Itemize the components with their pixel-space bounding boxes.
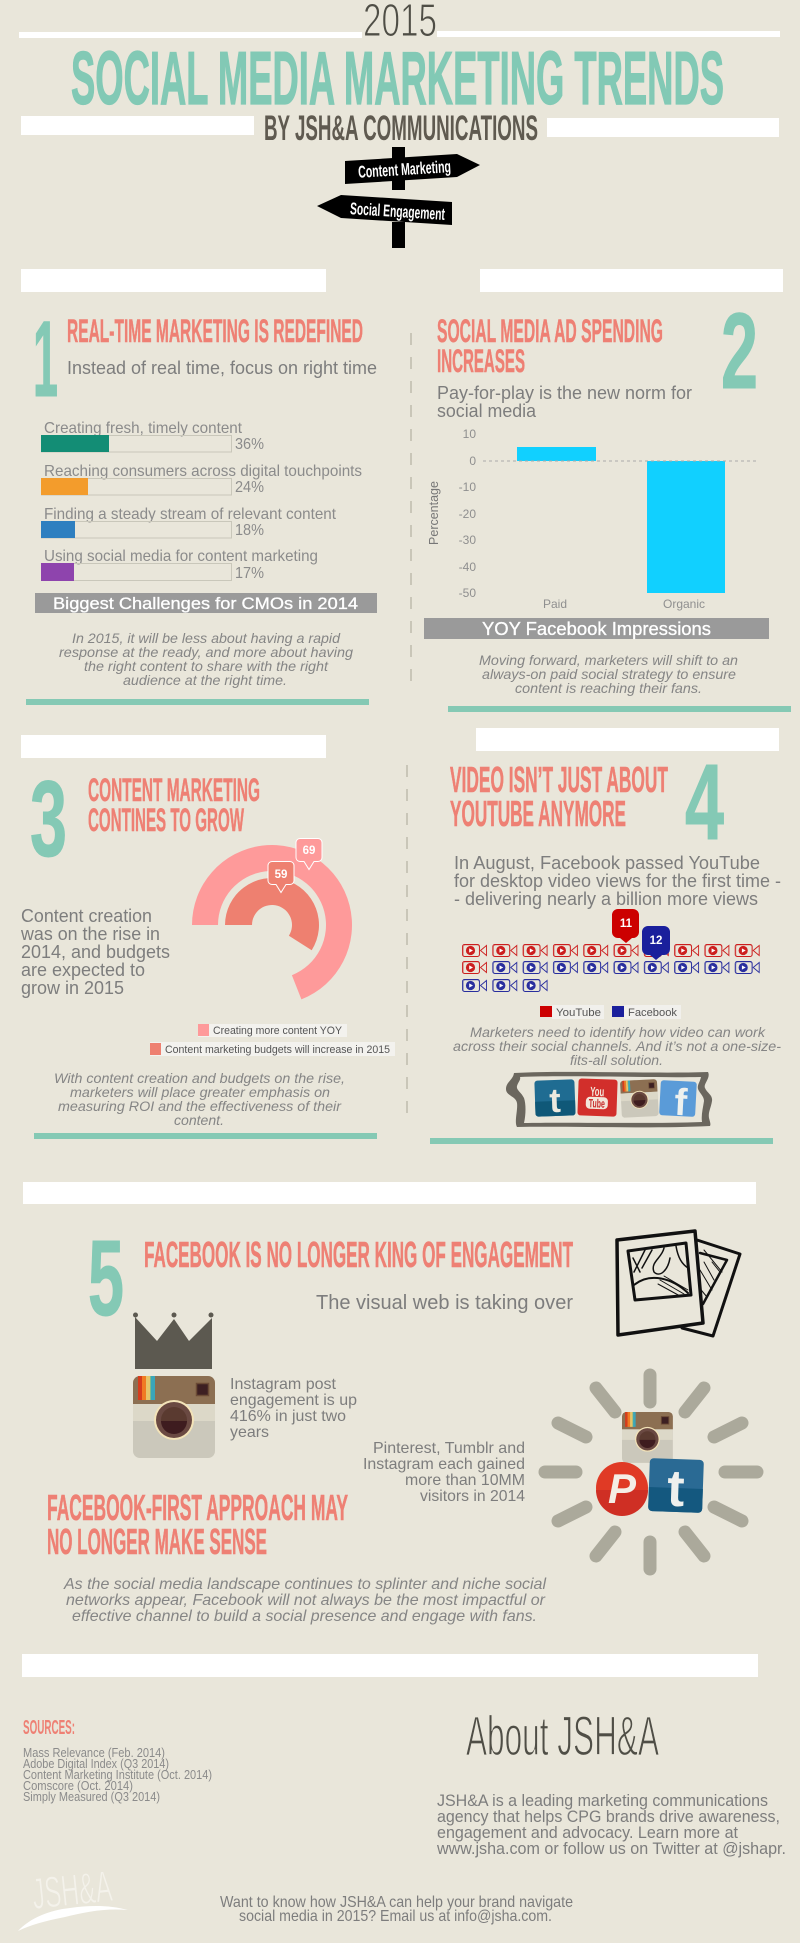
sources list: Comscore (Oct. 2014) [23, 1779, 133, 1793]
legend 3: Content marketing budgets will increase in 2015 [165, 1044, 390, 1056]
bar chart: YOY impressions: -40 [459, 560, 476, 574]
heading 3: CONTINES TO GROW [88, 802, 244, 838]
takeaway 1 [59, 630, 353, 688]
call to action: Want to know how JSH&A can help your brand navigate [220, 1894, 573, 1911]
panel: section 3 [20, 735, 395, 1139]
bar chart: YOY impressions: Paid [543, 597, 567, 611]
header rule left [19, 32, 362, 38]
body text 3: 2014, and budgets [21, 942, 170, 962]
body text 3 [20, 906, 170, 998]
heading 4 [450, 759, 668, 834]
takeaway 5 [63, 1576, 546, 1625]
pictogram chart: video icons [462, 909, 759, 992]
panel: section 3: CONTENT MARKETING [88, 772, 260, 808]
panel: section 5 [23, 1182, 757, 1625]
heading 2: INCREASES [437, 343, 525, 379]
call to action [220, 1894, 573, 1925]
footer: SOURCES: [23, 1717, 75, 1739]
crown icon [133, 1312, 214, 1369]
body text 3: are expected to [21, 960, 145, 980]
heading 2 [437, 313, 663, 379]
legend 4 [540, 1005, 681, 1019]
row: reaching consumers: 24% [235, 479, 264, 496]
subtitle rule left [21, 116, 254, 135]
about text: agency that helps CPG brands drive awareness, [437, 1807, 780, 1826]
icon: instagram [620, 1079, 659, 1118]
donut chart [192, 838, 352, 999]
bar chart: YOY impressions [427, 427, 759, 611]
icon: tumblr [648, 1458, 704, 1519]
legend 3 [150, 1024, 395, 1056]
sources list [23, 1746, 212, 1804]
stat: pinterest tumblr instagram: Instagram each gained [363, 1456, 525, 1473]
row: creating content: Creating fresh, timely content [44, 420, 243, 437]
legend 3: Creating more content YOY [213, 1025, 343, 1037]
sources list: Mass Relevance (Feb. 2014) [23, 1746, 165, 1760]
body text 3: grow in 2015 [21, 978, 124, 998]
footer [18, 1654, 786, 1931]
row: creating content: 36% [235, 436, 264, 453]
bar chart: YOY impressions: 10 [463, 427, 476, 441]
heading 5b [47, 1487, 348, 1562]
number 2: 2 [721, 290, 758, 411]
row: finding stream: Finding a steady stream of relevant content [44, 506, 337, 523]
takeaway 2: content is reaching their fans. [515, 680, 702, 696]
social icons in frame [506, 1072, 712, 1127]
body text 3: was on the rise in [20, 924, 160, 944]
subheading 5: The visual web is taking over [316, 1292, 573, 1314]
marker 12 [642, 926, 670, 960]
body text 4: - delivering nearly a billion more views [454, 889, 758, 909]
subheading 2: Pay-for-play is the new norm for [437, 383, 692, 403]
logo: JSH&A [18, 1862, 128, 1931]
bar chart: YOY impressions: -10 [459, 480, 476, 494]
takeaway 5: As the social media landscape continues to splinter and niche social [63, 1576, 546, 1593]
takeaway 4: across their social channels. And it’s not a one-size- [453, 1038, 781, 1054]
marker 12: 12 [650, 935, 662, 947]
takeaway 2: Moving forward, marketers will shift to an [479, 652, 738, 668]
stat: instagram engagement: 416% in just two [230, 1408, 346, 1425]
marker 59 [268, 862, 294, 892]
about text [436, 1791, 786, 1858]
header rule right [437, 31, 780, 37]
bar chart: challenges [41, 420, 362, 582]
subheading 2 [437, 383, 692, 421]
number 4: 4 [685, 741, 724, 862]
takeaway 5: networks appear, Facebook will not always be the most impactful or [66, 1592, 546, 1609]
sign label: social engagement: Social Engagement [349, 199, 446, 224]
row: reaching consumers: Reaching consumers across digital touchpoints [44, 463, 362, 480]
chart caption 1: Biggest Challenges for CMOs in 2014 [53, 594, 358, 613]
icon: youtube: Tube [589, 1096, 605, 1111]
bar chart: YOY impressions: -20 [459, 507, 476, 521]
chart caption 2: YOY Facebook Impressions [482, 619, 711, 639]
icon: sunburst of social networks [545, 1375, 757, 1569]
stat: instagram engagement [230, 1376, 357, 1441]
takeaway 4: fits-all solution. [570, 1052, 663, 1068]
stat: pinterest tumblr instagram [363, 1440, 525, 1505]
about heading: About JSH&A [466, 1704, 659, 1767]
legend 4: YouTube [556, 1007, 601, 1019]
subtitle: BY JSH&A COMMUNICATIONS [264, 109, 538, 148]
heading 3 [88, 772, 260, 838]
icon: facebook [659, 1080, 697, 1125]
takeaway 5: effective channel to build a social presence and engage with fans. [72, 1608, 537, 1625]
takeaway 3: marketers will place greater emphasis on [70, 1084, 330, 1100]
legend 4: Facebook [628, 1007, 678, 1019]
call to action: social media in 2015? Email us at info@jsha.com. [239, 1908, 552, 1925]
bar chart: YOY impressions: Percentage [427, 481, 441, 545]
row: using social: Using social media for content marketing [44, 548, 318, 565]
about text: JSH&A is a leading marketing communications [437, 1791, 768, 1810]
about text: www.jsha.com or follow us on Twitter at @jshapr. [436, 1839, 786, 1858]
number 5: 5 [88, 1217, 124, 1338]
sign label: content marketing: Content Marketing [358, 157, 452, 182]
icon: tumblr: t [666, 1460, 686, 1518]
bar chart: YOY impressions: Organic [663, 597, 705, 611]
takeaway 2 [479, 652, 738, 696]
subtitle rule right [547, 118, 779, 137]
heading 5b: NO LONGER MAKE SENSE [47, 1521, 267, 1562]
row: finding stream [41, 506, 337, 539]
row: reaching consumers [41, 463, 362, 496]
marker 11 [612, 909, 639, 943]
bar chart: YOY impressions: 0 [469, 454, 476, 468]
takeaway 2: always-on paid social strategy to ensure [482, 666, 736, 682]
number 3: 3 [30, 758, 67, 879]
takeaway 4 [453, 1024, 781, 1068]
stat: pinterest tumblr instagram: more than 10MM [405, 1472, 525, 1489]
icon: facebook: f [673, 1082, 688, 1124]
icon: instagram small [622, 1412, 673, 1463]
icon: instagram large [133, 1376, 215, 1458]
sources list: Content Marketing Institute (Oct. 2014) [23, 1768, 212, 1782]
takeaway 1: the right content to share with the right [84, 658, 329, 674]
row: using social [41, 548, 318, 582]
takeaway 3: content. [174, 1112, 224, 1128]
stat: instagram engagement: years [230, 1424, 269, 1441]
stat: instagram engagement: engagement is up [230, 1392, 357, 1409]
marker 69: 69 [303, 845, 315, 857]
icon: pinterest [596, 1462, 648, 1516]
icon: pinterest: P [608, 1465, 637, 1512]
icon: tumblr: t [549, 1082, 561, 1120]
subheading 2: social media [437, 401, 537, 421]
row: using social: 17% [235, 565, 264, 582]
chart caption 2 [424, 618, 769, 639]
panel: section 5: FACEBOOK-FIRST APPROACH MAY [47, 1487, 348, 1528]
body text 3: Content creation [21, 906, 152, 926]
sources list: Adobe Digital Index (Q3 2014) [23, 1757, 169, 1771]
takeaway 4: Marketers need to identify how video can work [470, 1024, 766, 1040]
panel: section 4 [430, 728, 781, 1144]
takeaway 1: response at the ready, and more about having [59, 644, 353, 660]
panel: section 1: 1 [33, 298, 58, 419]
icon: youtube: You [590, 1084, 605, 1099]
takeaway 1: In 2015, it will be less about having a rapid [72, 630, 341, 646]
row: finding stream: 18% [235, 522, 264, 539]
panel: section 1 [21, 269, 377, 705]
body text 4 [454, 853, 781, 909]
bar chart: YOY impressions: -50 [459, 586, 476, 600]
stat: instagram engagement: Instagram post [230, 1376, 337, 1393]
icon: polaroid photos [617, 1231, 740, 1336]
subheading 1: Instead of real time, focus on right time [67, 358, 377, 378]
header [19, 0, 780, 148]
sources list: Simply Measured (Q3 2014) [23, 1790, 160, 1804]
takeaway 1: audience at the right time. [123, 672, 287, 688]
panel: section 2 [424, 269, 791, 712]
icon: youtube [577, 1078, 618, 1117]
icon: signpost [317, 147, 480, 248]
takeaway 3 [54, 1070, 345, 1128]
takeaway 3: measuring ROI and the effectiveness of their [58, 1098, 342, 1114]
logo: JSH&A: JSH&A [30, 1862, 115, 1919]
about text: engagement and advocacy. Learn more at [437, 1823, 738, 1842]
marker 69 [296, 838, 322, 870]
body text 4: In August, Facebook passed YouTube [454, 853, 760, 873]
takeaway 3: With content creation and budgets on the rise, [54, 1070, 345, 1086]
icon: tumblr [534, 1079, 576, 1121]
bar chart: YOY impressions: -30 [459, 533, 476, 547]
panel: section 1: REAL-TIME MARKETING IS REDEFINED [67, 313, 363, 349]
stat: pinterest tumblr instagram: Pinterest, Tumblr and [373, 1440, 525, 1457]
stat: pinterest tumblr instagram: visitors in 2014 [420, 1488, 525, 1505]
marker 59: 59 [275, 869, 287, 881]
marker 11: 11 [620, 918, 633, 930]
body text 4: for desktop video views for the first time - [454, 871, 781, 891]
row: creating content [41, 420, 264, 453]
